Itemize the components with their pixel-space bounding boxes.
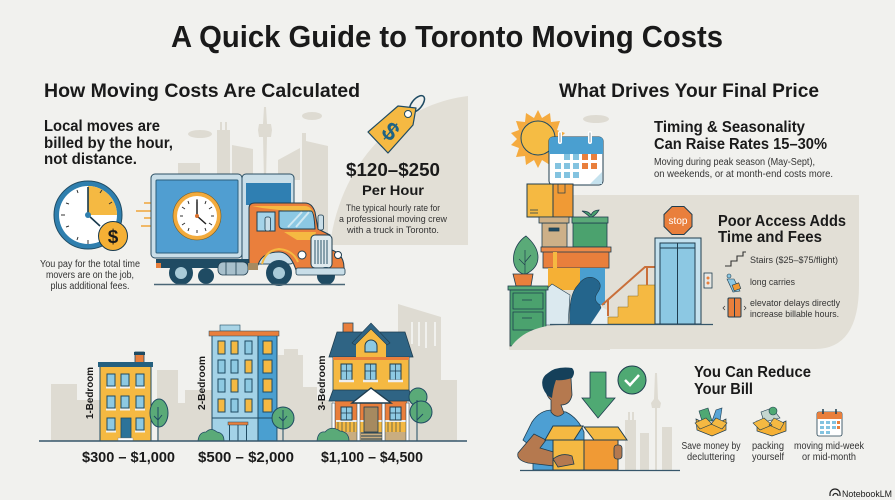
background: skyline behind person bbox=[625, 373, 672, 470]
text: timing and seasonality bbox=[654, 119, 833, 180]
text: you can reduce your bill bbox=[694, 364, 811, 398]
icon: clock with dollar coin bbox=[54, 181, 128, 250]
text: hourly price: $120–$250 bbox=[346, 160, 440, 180]
list item: elevator delays: increase billable hours. bbox=[750, 309, 839, 320]
heading: what drives your final price: What Drives Your Final Price bbox=[559, 80, 819, 102]
price: 1-bedroom: $300 – $1,000 bbox=[82, 449, 175, 466]
illustration: stack of belongings bbox=[508, 184, 611, 350]
text: hourly price: with a truck in Toronto. bbox=[346, 225, 439, 236]
panel: poor access bbox=[509, 195, 859, 349]
icon: price tag: $ bbox=[376, 117, 405, 147]
list item: stairs bbox=[725, 252, 838, 266]
text: poor access heading: Poor Access Adds bbox=[718, 213, 846, 230]
text: hourly price: a professional moving crew bbox=[339, 214, 447, 225]
text: you pay for total time: plus additional fees. bbox=[50, 281, 130, 292]
tip: moving mid-week: or mid-month bbox=[802, 452, 856, 463]
background: skyline behind truck bbox=[178, 107, 328, 245]
box: orange tub bbox=[541, 247, 611, 268]
ground line bbox=[39, 440, 467, 442]
title: A Quick Guide to Toronto Moving Costs bbox=[171, 20, 723, 54]
text: poor access heading bbox=[718, 213, 846, 246]
text: hourly price bbox=[339, 160, 447, 236]
icon: stop sign bbox=[664, 206, 692, 234]
ground line: person scene bbox=[520, 470, 680, 472]
tip: moving mid-week bbox=[794, 409, 865, 463]
text: you can reduce your bill: Your Bill bbox=[694, 381, 753, 398]
text: poor access heading: Time and Fees bbox=[718, 229, 822, 246]
label: 2-bedroom: 2-Bedroom bbox=[197, 356, 208, 410]
text: local moves note: billed by the hour, bbox=[44, 135, 173, 152]
icon: price tag bbox=[368, 93, 427, 153]
text: you pay for total time: You pay for the total time bbox=[40, 259, 140, 270]
background: beige price panel bbox=[330, 96, 468, 245]
list item: elevator delays: elevator delays directly bbox=[750, 298, 840, 309]
building: 2-bedroom bbox=[198, 325, 294, 441]
tip: packing yourself bbox=[752, 407, 786, 463]
text: local moves note: Local moves are bbox=[44, 118, 160, 135]
items: round bags bbox=[548, 268, 580, 290]
heading: how moving costs are calculated: How Moving Costs Are Calculated bbox=[44, 80, 360, 102]
logo: notebooklm: NotebookLM bbox=[842, 489, 892, 500]
icon: stop sign: stop bbox=[669, 216, 688, 227]
tip: decluttering bbox=[682, 408, 740, 463]
text: hourly price: The typical hourly rate for bbox=[346, 203, 440, 214]
illustration: person with box bbox=[518, 368, 627, 470]
list item: long carries bbox=[727, 274, 795, 292]
list item: long carries: long carries bbox=[750, 277, 795, 288]
icon: sun with cloud bbox=[511, 110, 609, 168]
text: timing and seasonality: Timing & Seasonality bbox=[654, 119, 805, 136]
label: 1-bedroom: 1-Bedroom bbox=[85, 367, 96, 419]
tip: decluttering: decluttering bbox=[687, 452, 735, 463]
list item: stairs: Stairs ($25–$75/flight) bbox=[750, 255, 838, 266]
box: top cardboard box bbox=[527, 184, 573, 217]
label: 3-bedroom: 3-Bedroom bbox=[317, 355, 328, 411]
price: 2-bedroom: $500 – $2,000 bbox=[198, 449, 294, 466]
text: hourly price: Per Hour bbox=[362, 182, 425, 198]
list item: elevator delays bbox=[723, 298, 840, 320]
text: local moves note bbox=[44, 118, 173, 168]
icon: elevator bbox=[655, 238, 712, 324]
icon: open cardboard box bbox=[545, 426, 627, 470]
tip: decluttering: Save money by bbox=[682, 441, 740, 452]
text: you pay for total time bbox=[40, 259, 140, 292]
tip: moving mid-week: moving mid-week bbox=[794, 441, 865, 452]
text: local moves note: not distance. bbox=[44, 151, 137, 168]
icon: moving truck bbox=[136, 174, 345, 286]
illustration: yellow stairs with rail bbox=[602, 267, 655, 324]
building: 3-bedroom house bbox=[317, 323, 432, 441]
text: timing and seasonality: Can Raise Rates 15–30% bbox=[654, 136, 827, 153]
icon: dollar coin: $ bbox=[108, 227, 119, 248]
text: you pay for total time: movers are on the job, bbox=[46, 270, 134, 281]
building: 1-bedroom bbox=[98, 352, 168, 441]
panel: beige corner curve bbox=[509, 325, 610, 350]
text: timing and seasonality: Moving during peak season (May-Sept), bbox=[654, 157, 815, 168]
text: you can reduce your bill: You Can Reduce bbox=[694, 364, 811, 381]
text: timing and seasonality: on weekends, or at month-end costs more. bbox=[654, 169, 833, 180]
background: skyline behind buildings bbox=[51, 304, 457, 441]
box: green box with leaves bbox=[572, 210, 608, 247]
icon: green down arrow bbox=[582, 372, 615, 418]
icon: potted plant bbox=[513, 236, 538, 286]
tip: packing yourself: packing bbox=[752, 441, 784, 452]
icon: green check circle bbox=[618, 366, 646, 394]
furniture: green dresser bbox=[508, 286, 548, 346]
price: 3-bedroom: $1,100 – $4,500 bbox=[321, 449, 423, 466]
tip: packing yourself: yourself bbox=[752, 452, 784, 463]
box: tan storage box bbox=[539, 217, 569, 247]
ground line: access scene bbox=[550, 324, 713, 326]
icon: calendar bbox=[549, 133, 603, 185]
